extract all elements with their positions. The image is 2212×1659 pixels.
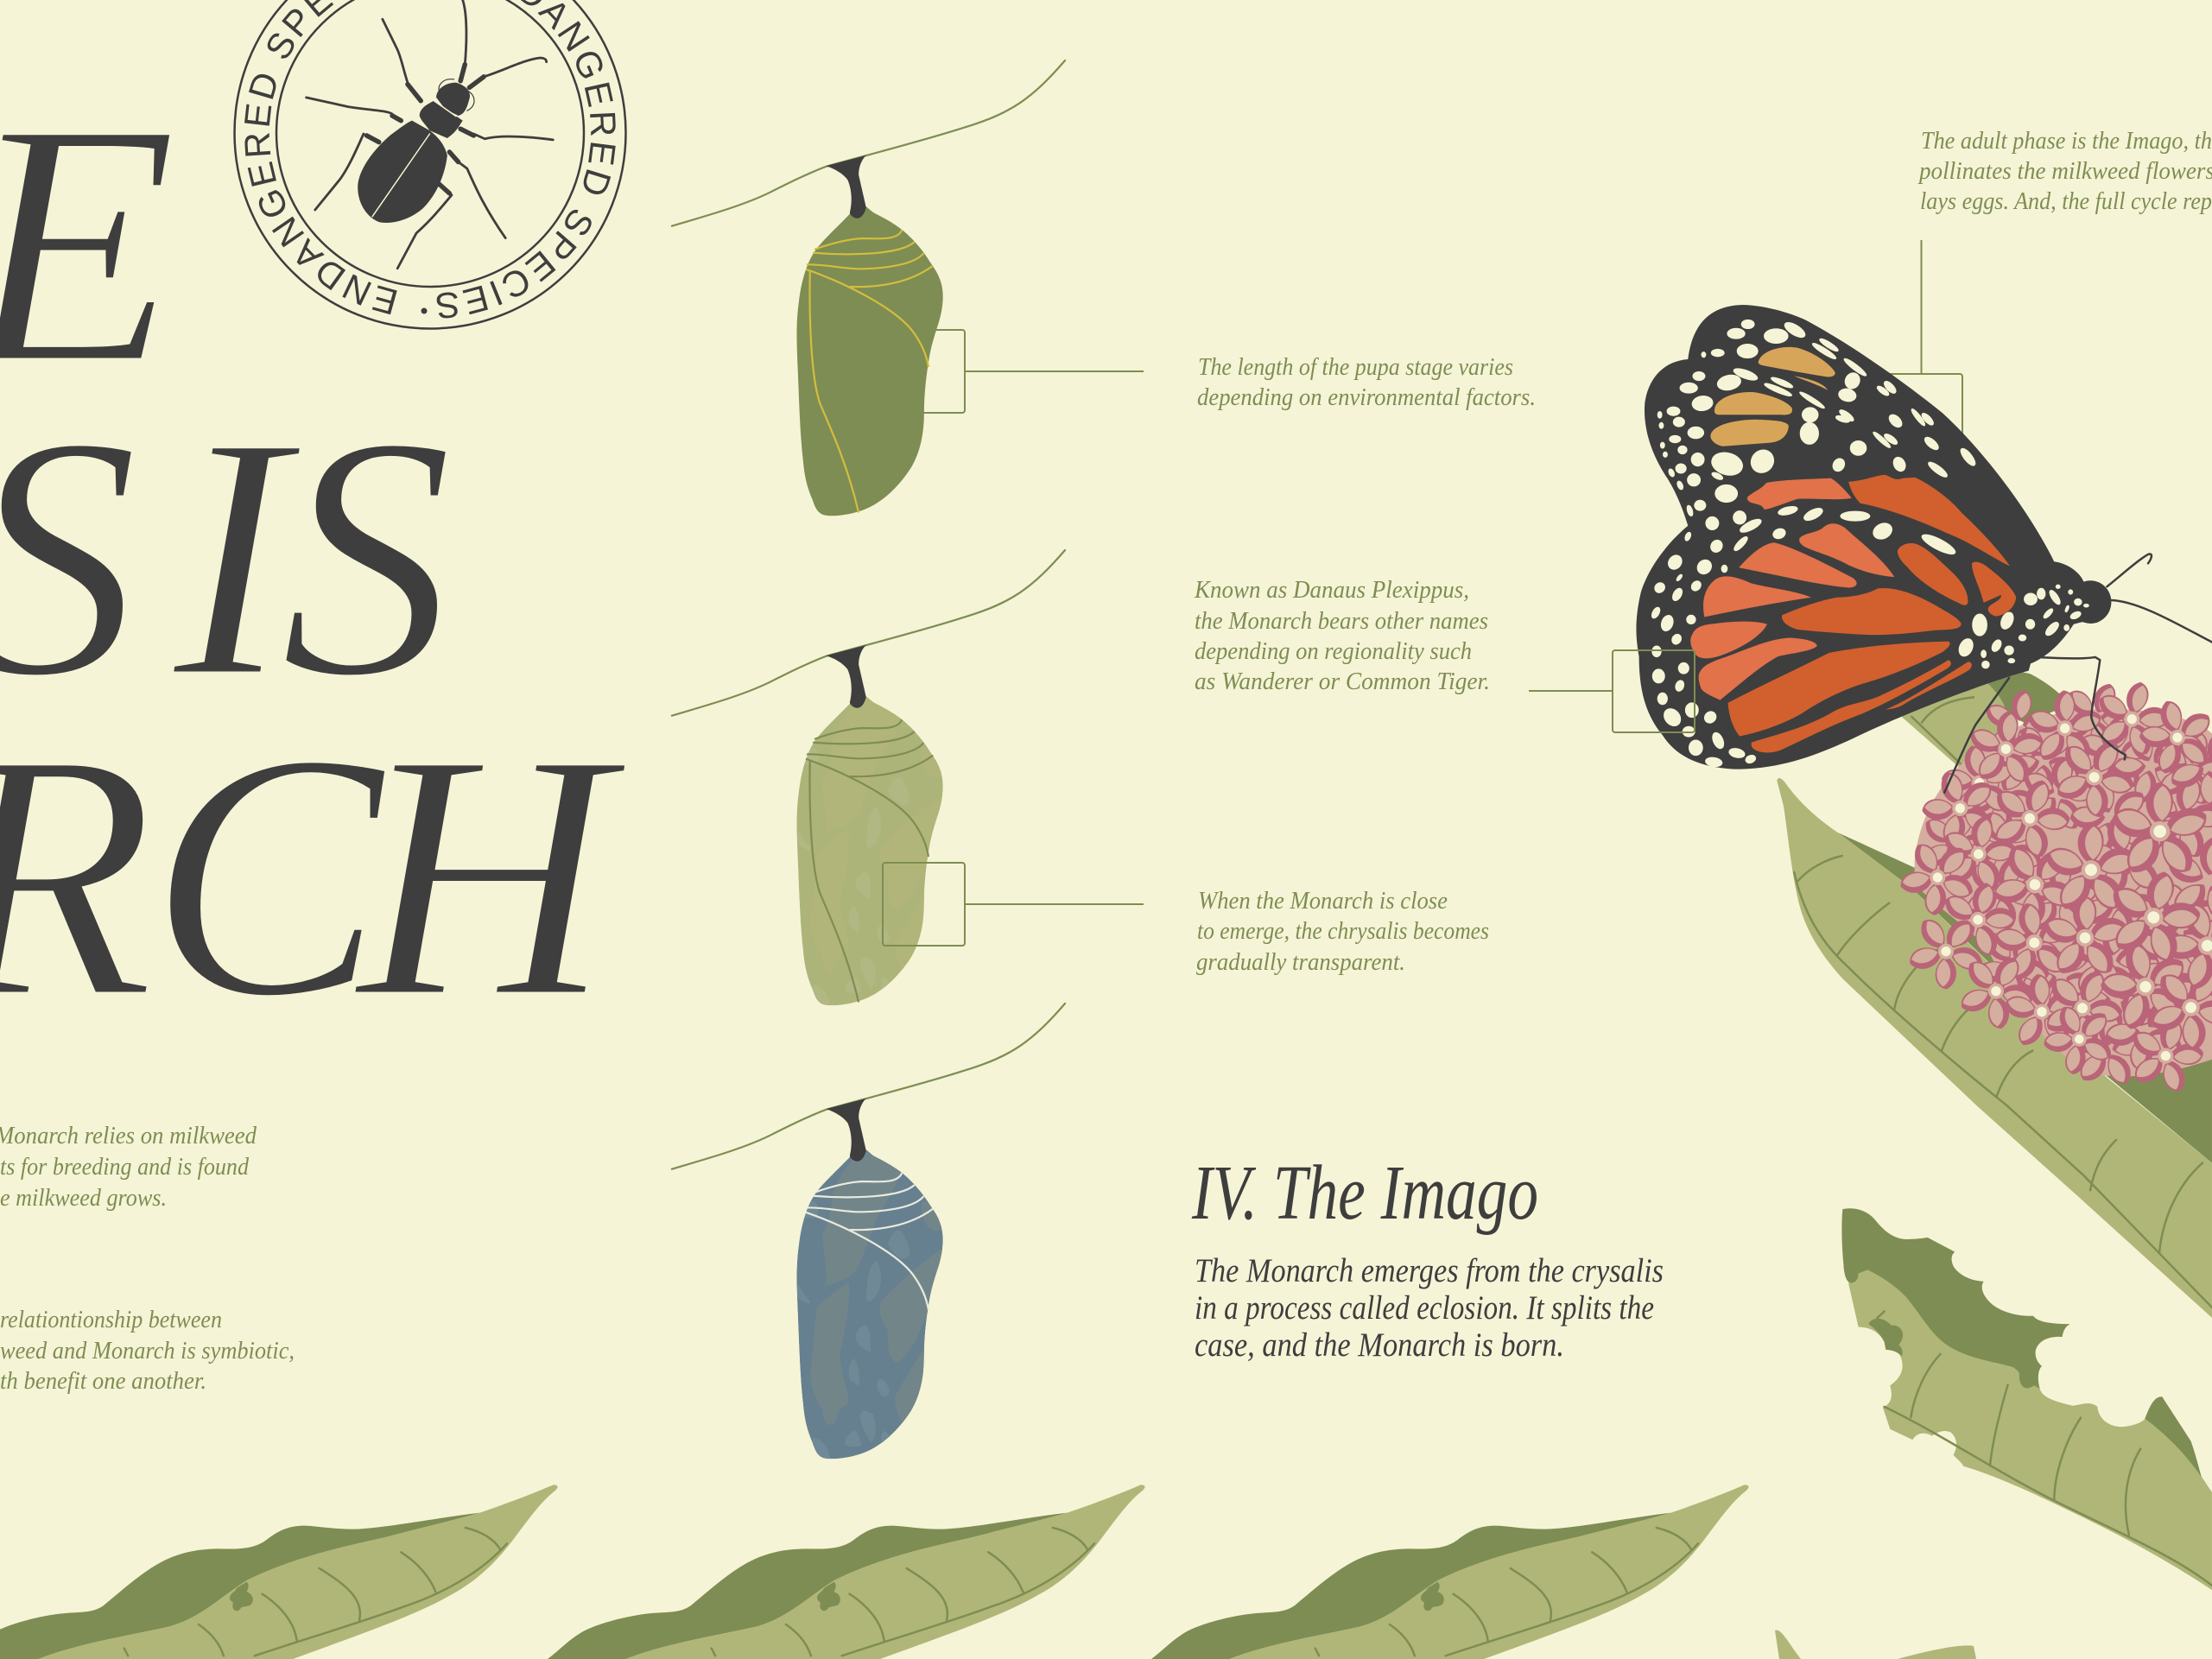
eaten leaf veins: [1877, 1312, 2212, 1586]
text: symbiosis note left: weed and Monarch is symbiotic,: [0, 1337, 295, 1365]
bracket: imago note connector behind wing: [1866, 240, 1962, 458]
text: Danaus Plexippus note: depending on regionality such: [1195, 637, 1472, 665]
stalk 3: [826, 1099, 866, 1162]
text: Danaus Plexippus note: [1194, 576, 1490, 695]
text: symbiosis note left: relationtionship between: [0, 1306, 222, 1333]
text: symbiosis note left: th benefit one another.: [0, 1367, 206, 1395]
milkweed leaf large: [1777, 778, 2212, 1318]
eaten leaf light blade: [1848, 1270, 2212, 1590]
wing spots: [1651, 320, 2088, 768]
butterfly antennae: [2107, 554, 2212, 643]
bands 2: [807, 720, 933, 1002]
text: milkweed note left: ts for breeding and is found: [0, 1153, 249, 1181]
butterfly: monarch: [1636, 305, 2212, 793]
chrysalis 3: blue: [672, 1004, 1065, 1460]
flower florets: [1885, 672, 2212, 1102]
bracket: regional names callout: [1529, 650, 1695, 732]
icon: beetle: [307, 0, 553, 269]
text: pupa stage note: depending on environmental factors.: [1197, 383, 1536, 411]
deep orange cells: [1728, 475, 2016, 752]
text: symbiosis note left: [0, 1306, 295, 1395]
butterfly legs: [1944, 657, 2126, 793]
large leaf blade: [1777, 778, 2212, 1318]
light orange cells: [1690, 478, 1894, 700]
text: transparency note: to emerge, the chrysalis becomes: [1197, 917, 1489, 945]
stamp rings: [235, 0, 625, 328]
cocoon body 2: [796, 696, 943, 1006]
chrysalis 1: green: [672, 60, 1065, 516]
milkweed leaf behind butterfly: [1902, 671, 2070, 769]
text: pupa stage note: The length of the pupa stage varies: [1198, 353, 1513, 381]
title: large serif heading fragments: [0, 51, 632, 1071]
text: transparency note: When the Monarch is close: [1198, 887, 1448, 915]
gold bands 1: [807, 231, 933, 512]
bottom leaf fragment: [1775, 1631, 1976, 1659]
milkweed flower cluster: [1885, 668, 2212, 1102]
amber forewing cells: [1710, 347, 1835, 446]
text: milkweed note left: Monarch relies on milkweed: [0, 1122, 257, 1149]
large leaf veins: [1794, 856, 2212, 1308]
stamp dot: [421, 307, 427, 314]
text: eclosion paragraph: The Monarch emerges from the crysalis: [1195, 1252, 1664, 1289]
bottom leaf 2: [548, 1485, 1145, 1659]
text: Danaus Plexippus note: the Monarch bears other names: [1195, 607, 1488, 635]
text: milkweed note left: [0, 1122, 257, 1212]
bracket: transparency callout: [883, 863, 1144, 946]
upper leaf blade: [1902, 682, 2015, 769]
butterfly head: [2069, 580, 2111, 624]
branch 1: [672, 60, 1065, 226]
flower disk: [1915, 709, 2212, 1076]
chrysalis 2: translucent: [672, 550, 1065, 1006]
large leaf dark underside: [1838, 833, 2212, 1163]
text: imago note top right: [1917, 127, 2212, 215]
text: eclosion paragraph: [1195, 1252, 1664, 1364]
upper leaf veins: [1911, 697, 1974, 764]
butterfly wing silhouette: [1636, 305, 2088, 769]
stamp: endangered species beetle badge: [233, 0, 627, 330]
text: milkweed note left: e milkweed grows.: [0, 1184, 167, 1212]
back petal layer: [1908, 668, 2212, 1091]
bottom leaf 1: [0, 1485, 558, 1659]
branch 2: [672, 550, 1065, 716]
text: Danaus Plexippus note: Known as Danaus Plexippus,: [1194, 576, 1469, 604]
stalk 2: [826, 645, 866, 708]
text: transparency note: gradually transparent.: [1196, 948, 1405, 976]
eaten leaf dark underside: [1841, 1208, 2202, 1478]
stalk 1: [826, 155, 866, 218]
heading: IV. The Imago: IV. The Imago: [1191, 1150, 1538, 1236]
cocoon body 1: [796, 206, 943, 516]
bottom leaf 3: [1151, 1485, 1749, 1659]
upper leaf underside: [1987, 671, 2070, 723]
bands 3: [807, 1174, 933, 1309]
text: Danaus Plexippus note: as Wanderer or Common Tiger.: [1195, 668, 1490, 695]
text: pupa stage note: [1197, 353, 1536, 411]
text: eclosion paragraph: case, and the Monarch is born.: [1195, 1327, 1564, 1364]
cocoon body 3: [796, 1149, 943, 1460]
branch 3: [672, 1004, 1065, 1169]
bracket: pupa stage callout: [881, 330, 1144, 413]
eaten leaf: [1841, 1208, 2212, 1590]
text: transparency note: [1196, 887, 1489, 976]
text: eclosion paragraph: in a process called eclosion. It splits the: [1195, 1289, 1654, 1327]
